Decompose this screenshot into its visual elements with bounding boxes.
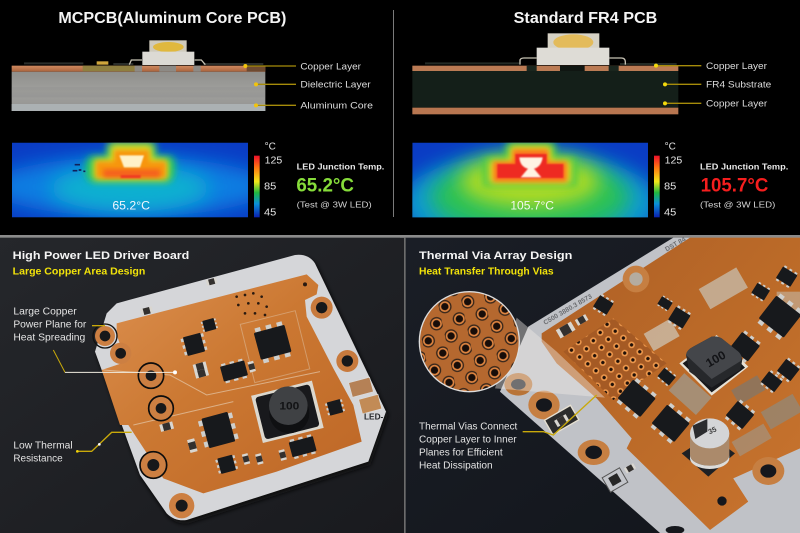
labels: MCPCB layers: Dielectric Layer (300, 79, 371, 89)
labels: MCPCB layers: Aluminum Core (300, 100, 373, 110)
readout: MCPCB junction temperature: 65.2°C (296, 175, 354, 197)
heading: MCPCB: MCPCB(Aluminum Core PCB) (58, 10, 286, 27)
icon: MCPCB LED package (142, 40, 194, 65)
thermal map: MCPCB (12, 142, 248, 218)
readout: FR4 junction temperature: 105.7°C (701, 175, 768, 197)
icon: electrolytic capacitor: 35 (707, 425, 718, 436)
components (542, 236, 800, 492)
panel: FR4 comparison (412, 12, 788, 218)
callout: thermal vias (419, 395, 597, 472)
colour scale: FR4: °C (665, 142, 676, 153)
cross-section: MCPCB layers (12, 60, 265, 111)
callout: thermal vias: Planes for Efficient (419, 447, 503, 458)
heading: FR4: Standard FR4 PCB (514, 10, 657, 27)
callout: thermal vias: Thermal Vias Connect (419, 421, 518, 432)
thermal reading: MCPCB: 65.2°C (112, 199, 150, 212)
readout: MCPCB junction temperature (296, 161, 384, 209)
panel: MCPCB comparison (0, 10, 384, 218)
colour scale: MCPCB (254, 142, 283, 218)
thermal map: FR4 (412, 142, 648, 218)
heading: thermal via array (419, 250, 572, 277)
colour scale: MCPCB: 125 (265, 156, 283, 167)
colour scale: FR4 (654, 142, 683, 218)
icon: inductor marked 100: 100 (703, 348, 728, 370)
colour scale: FR4: 85 (664, 181, 677, 192)
colour scale: FR4: 45 (664, 207, 677, 218)
components: DST 84 (664, 236, 687, 253)
labels: MCPCB layers (300, 61, 373, 110)
callout lines: MCPCB layers (243, 64, 296, 107)
icon: FR4 LED package (537, 33, 609, 65)
readout: FR4 junction temperature (700, 161, 788, 209)
photo: driver board: LED- (364, 412, 384, 421)
mounting holes (504, 266, 784, 533)
colour scale: MCPCB: 45 (264, 207, 277, 218)
labels: FR4 layers: Copper Layer (706, 61, 767, 71)
copper plane (102, 274, 362, 493)
readout: FR4 junction temperature: LED Junction Temp. (700, 161, 788, 171)
mounting holes (93, 297, 358, 518)
panel: Thermal Via Array Design (400, 235, 800, 533)
labels: FR4 layers: Copper Layer (706, 98, 767, 108)
labels: MCPCB layers: Copper Layer (300, 61, 361, 71)
heading: driver board: Large Copper Area Design (13, 266, 145, 277)
labels: FR4 layers (706, 61, 771, 108)
cross-section: FR4 layers (412, 58, 678, 114)
callout: copper power plane: Power Plane for (13, 319, 87, 330)
colour scale: FR4: 125 (665, 156, 683, 167)
divider (393, 10, 394, 217)
thermal via array (563, 318, 667, 400)
magnifier cone (495, 318, 605, 398)
readout: MCPCB junction temperature: LED Junction Temp. (297, 161, 384, 171)
callout: low thermal resistance: Resistance (13, 453, 63, 464)
readout: FR4 junction temperature: (Test @ 3W LED) (700, 199, 775, 209)
callout: thermal vias: Copper Layer to Inner (419, 434, 517, 445)
callout lines: FR4 layers (654, 64, 701, 105)
panel: High Power LED Driver Board (0, 235, 405, 533)
components (140, 277, 382, 475)
colour scale: MCPCB: 85 (264, 181, 277, 192)
icon: inductor marked 100 (679, 335, 748, 396)
thermal reading: FR4: 105.7°C (510, 199, 554, 212)
heading: thermal via array: Heat Transfer Through Vias (419, 266, 554, 277)
callout: copper power plane (13, 306, 177, 374)
photo: thermal via board (500, 236, 800, 533)
heading: thermal via array: Thermal Via Array Design (419, 250, 572, 262)
photo: driver board (93, 255, 388, 524)
callout: thermal vias: Heat Dissipation (419, 461, 493, 472)
colour scale: MCPCB: °C (265, 142, 276, 153)
callout: low thermal resistance: Low Thermal (13, 440, 73, 451)
callout: low thermal resistance (13, 432, 132, 464)
heading: driver board: High Power LED Driver Board (13, 250, 189, 262)
icon: inductor marked 100 (251, 381, 324, 443)
callout: copper power plane: Heat Spreading (13, 333, 85, 344)
icon: magnifier showing vias (419, 291, 520, 392)
readout: MCPCB junction temperature: (Test @ 3W LED) (297, 199, 372, 209)
labels: FR4 layers: FR4 Substrate (706, 79, 771, 89)
icon: inductor marked 100: 100 (279, 400, 299, 412)
icon: electrolytic capacitor (682, 418, 735, 477)
callout: copper power plane: Large Copper (13, 306, 77, 317)
via cluster (235, 282, 307, 316)
components: C500 3880.3 8573 (542, 293, 594, 327)
heading: driver board (13, 250, 189, 277)
